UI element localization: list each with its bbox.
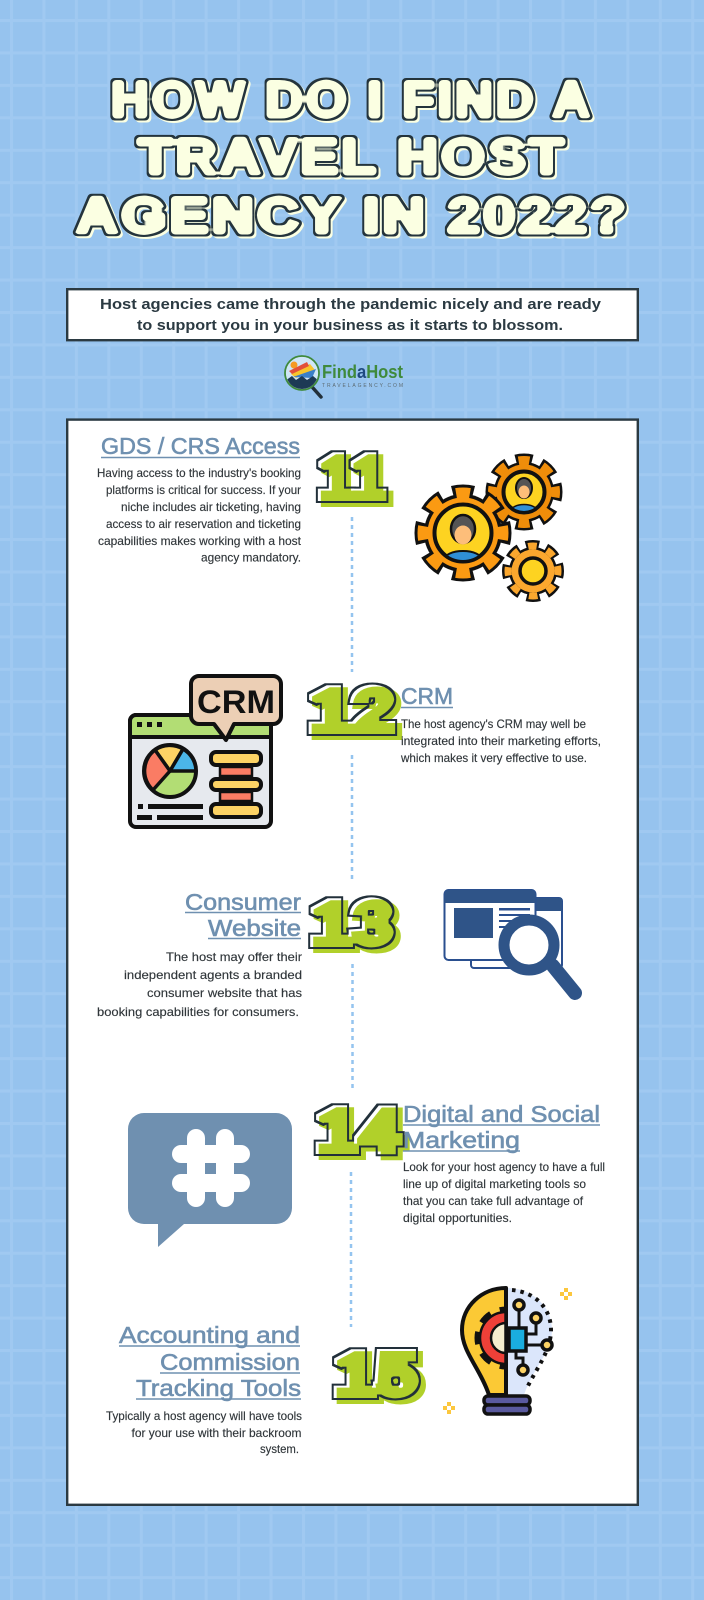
item 12 body text	[400, 717, 601, 765]
item 13 heading: Consumer Website: Consumer	[185, 889, 301, 915]
number 12: 12	[308, 676, 394, 745]
title: HOW DO I FIND A	[111, 72, 593, 128]
item 15 heading: Accounting and Commission Tracking Tools	[119, 1322, 301, 1401]
bulb base	[484, 1396, 530, 1405]
item 15 body text: Typically a host agency will have tools	[106, 1409, 302, 1423]
item 13 body text: booking capabilities for consumers.	[97, 1005, 299, 1019]
item 14 body text: that you can take full advantage of	[403, 1194, 584, 1208]
item 11 body text: niche includes air ticketing, having	[121, 500, 301, 514]
right half of bulb	[506, 1288, 552, 1395]
icon: lightbulb with gear and circuit	[443, 1288, 572, 1414]
bottom right gear	[507, 545, 559, 597]
item 13 heading: Consumer Website: Website	[208, 915, 301, 941]
item 13 heading: Consumer Website	[185, 889, 301, 941]
item 15 body text	[106, 1409, 302, 1456]
number 15: 15	[333, 1340, 417, 1409]
title: TRAVEL HOST	[138, 128, 567, 184]
icon: hashtag speech bubble	[128, 1113, 292, 1247]
icon: gears with people	[422, 460, 559, 597]
half gear	[474, 1306, 504, 1370]
logo: Find a Host Travel Agency: FindaHost	[322, 362, 403, 382]
item 11 body text: Having access to the industry's booking	[97, 466, 301, 480]
item 11 body text: capabilities makes working with a host	[98, 534, 302, 548]
icon: website windows with magnifier	[444, 890, 575, 993]
item 14 heading: Digital and Social Marketing	[403, 1101, 600, 1153]
item 11 body text: platforms is critical for success. If your	[106, 483, 301, 497]
item 13 body text: independent agents a branded	[124, 968, 302, 982]
big gear	[422, 492, 504, 574]
logo: Find a Host Travel Agency: TRAVELAGENCY.COM	[322, 383, 403, 389]
logo: Find a Host Travel Agency	[285, 356, 403, 397]
item 12 body text: which makes it very effective to use.	[400, 751, 587, 765]
speech bubble: CRM	[197, 684, 275, 720]
window header	[130, 715, 271, 737]
main panel	[67, 420, 638, 1505]
item 13 body text: consumer website that has	[147, 986, 302, 1000]
top right gear	[492, 460, 556, 524]
item 12 heading: CRM: CRM	[401, 683, 453, 709]
item 15 body text: for your use with their backroom	[132, 1426, 302, 1440]
intro text box	[67, 289, 638, 340]
magnifier	[553, 966, 575, 993]
item 11 heading: GDS / CRS Access: GDS / CRS Access	[101, 433, 300, 459]
pie chart	[144, 745, 196, 797]
sparkle bottom left	[443, 1402, 455, 1414]
item 14 body text: Look for your host agency to have a full	[403, 1160, 605, 1174]
left half of bulb	[462, 1288, 506, 1395]
item 14 body text	[403, 1160, 605, 1225]
number 11: 11	[317, 443, 385, 512]
item 13 body text: The host may offer their	[166, 950, 302, 964]
intro text box: to support you in your business as it starts to blossom.	[137, 317, 563, 334]
speech bubble	[191, 676, 281, 740]
back window	[471, 898, 562, 968]
item 15 heading: Accounting and Commission Tracking Tools: Tracking Tools	[136, 1375, 301, 1401]
legend lines	[138, 804, 143, 809]
title: AGENCY IN 2022?	[76, 188, 629, 244]
number 14: 14	[315, 1096, 400, 1165]
number 13: 13	[310, 889, 392, 958]
intro text box: Host agencies came through the pandemic nicely and are ready	[100, 296, 602, 313]
item 14 body text: digital opportunities.	[403, 1211, 512, 1225]
item 14 heading: Digital and Social Marketing: Marketing	[403, 1127, 520, 1153]
item 12 body text: integrated into their marketing efforts,	[401, 734, 601, 748]
circuit traces	[516, 1311, 541, 1364]
item 15 body text: system.	[260, 1442, 299, 1456]
sparkle top right	[560, 1288, 572, 1300]
window	[130, 715, 271, 827]
item 15 heading: Accounting and Commission Tracking Tools: Accounting and	[119, 1322, 300, 1348]
circuit nodes	[514, 1300, 552, 1375]
item 13 body text	[97, 950, 302, 1019]
item 14 heading: Digital and Social Marketing: Digital and Social	[403, 1101, 600, 1127]
stacked bars	[211, 752, 261, 817]
title	[76, 72, 629, 244]
item 11 body text: agency mandatory.	[201, 550, 301, 564]
chip	[509, 1328, 526, 1351]
timeline dotted connector	[351, 517, 352, 1327]
item 14 body text: line up of digital marketing tools so	[403, 1177, 586, 1191]
item 15 heading: Accounting and Commission Tracking Tools: Commission	[160, 1349, 300, 1375]
icon: CRM dashboard window	[130, 676, 281, 827]
item 11 body text	[97, 466, 302, 564]
front window	[444, 890, 536, 960]
item 12 body text: The host agency's CRM may well be	[401, 717, 586, 731]
item 11 body text: access to air reservation and ticketing	[106, 517, 301, 531]
